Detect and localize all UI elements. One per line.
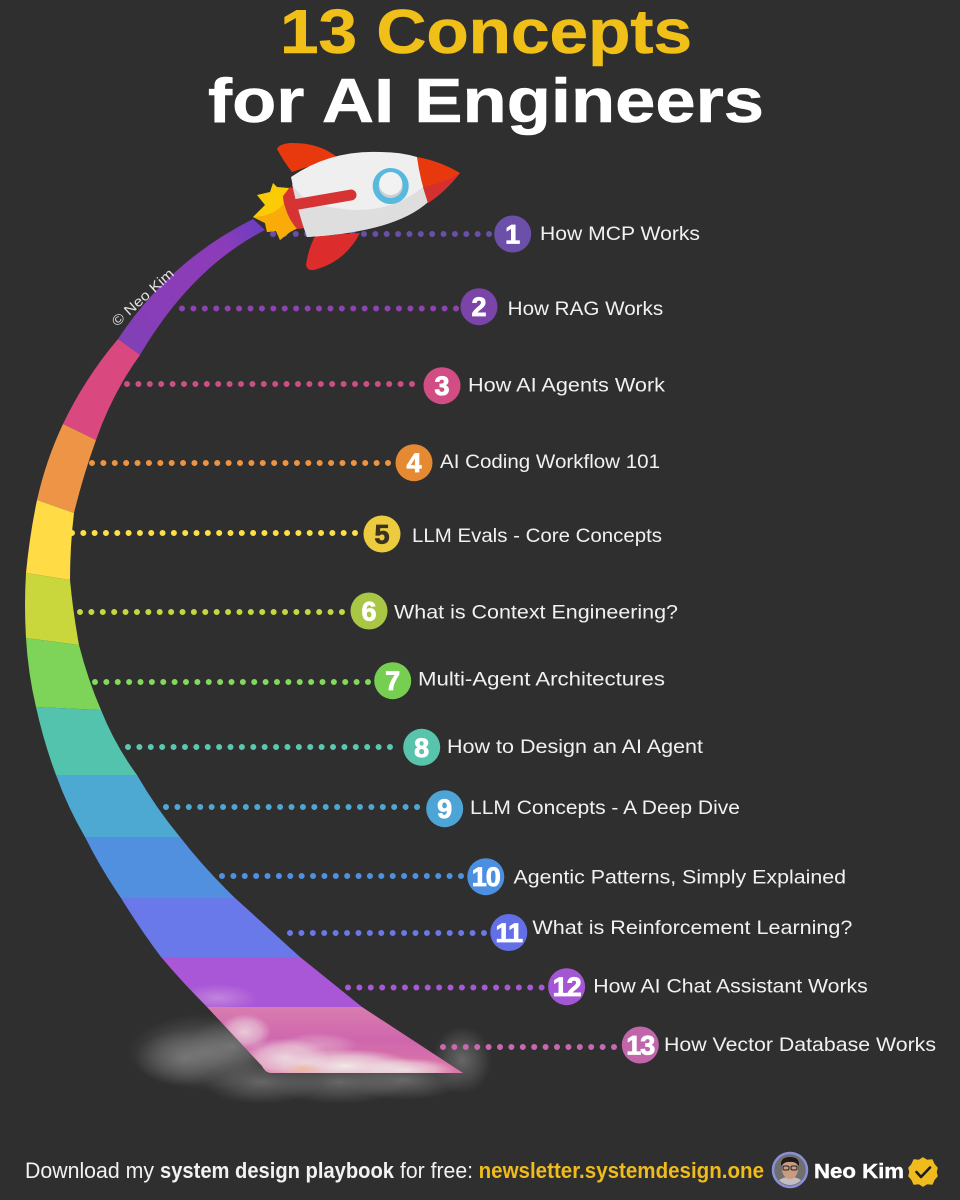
rocket body [291,152,428,237]
item 1 [273,216,700,252]
trail band: violet [161,957,362,1007]
rocket nose [417,157,460,203]
footer call to action: Download my [25,1158,154,1183]
item 10: Agentic Patterns, Simply Explained [514,867,846,889]
trail band: purple [118,219,265,355]
item 4: AI Coding Workflow 101 [440,451,660,473]
trail band: teal [36,707,137,775]
rocket bottom fin [306,233,360,270]
footer call to action: newsletter.systemdesign.one [479,1158,764,1183]
trail band: yellow [26,500,74,580]
watermark: © Neo Kim [108,265,177,329]
item 6: 6 [361,596,377,626]
author avatar [773,1153,807,1190]
item 4 [92,444,660,481]
item 9: LLM Concepts - A Deep Dive [470,797,740,819]
author name: Neo Kim [814,1161,904,1183]
item 11: 11 [496,918,523,948]
item 2: How RAG Works [508,298,663,320]
item 5: LLM Evals - Core Concepts [412,525,662,547]
item 6: What is Context Engineering? [394,602,678,624]
item 13: 13 [626,1030,655,1060]
item 10: 10 [472,862,500,892]
title [208,0,764,136]
item 1: 1 [505,220,520,250]
item 8: How to Design an AI Agent [447,736,704,758]
rainbow rocket trail [25,219,463,1073]
rocket stripe [283,190,352,211]
footer call to action [25,1158,764,1183]
item 12 [348,968,868,1005]
footer call to action: for free: [400,1158,473,1183]
smoke cloud behind trail [127,1014,492,1104]
trail band: pink [63,339,140,440]
rocket top fin [277,143,337,172]
title: 13 Concepts [280,0,692,67]
item 13 [443,1026,936,1064]
footer call to action: system design playbook [160,1158,395,1183]
smoke over trail base [193,986,452,1073]
trail band: indigo [121,898,300,957]
trail band: orange [37,424,96,513]
trail band: sky blue [56,775,180,837]
item 11 [290,914,853,951]
item 3: 3 [434,371,450,401]
rocket flame [253,183,298,240]
item 11: What is Reinforcement Learning? [532,917,853,939]
item 3 [127,367,665,404]
icon: verified badge [909,1158,937,1186]
item 10 [222,858,846,895]
item 6 [80,592,678,630]
item 8: 8 [414,733,429,763]
trail band: magenta with smoke [207,1007,463,1073]
rocket exhaust collar [283,187,306,229]
rocket body shading [292,184,428,237]
item 7 [95,662,665,699]
item 2: 2 [471,292,487,322]
item 7: 7 [385,666,400,696]
item 5: 5 [374,520,390,550]
item 5 [72,516,662,552]
trail band: blue [85,837,235,898]
item 8 [128,729,704,766]
item 1: How MCP Works [540,223,700,245]
title: for AI Engineers [208,67,764,136]
trail band: lime [25,573,79,645]
item 7: Multi-Agent Architectures [418,669,665,691]
icon: rocket [253,143,460,270]
item 9: 9 [437,794,452,824]
item 9 [166,790,740,827]
item 3: How AI Agents Work [468,375,665,397]
item 12: 12 [553,972,581,1002]
item 13: How Vector Database Works [664,1034,936,1056]
item 4: 4 [406,448,422,478]
item 12: How AI Chat Assistant Works [593,975,868,997]
rocket window [376,171,406,201]
item 2 [182,288,663,325]
trail band: green [26,638,101,710]
